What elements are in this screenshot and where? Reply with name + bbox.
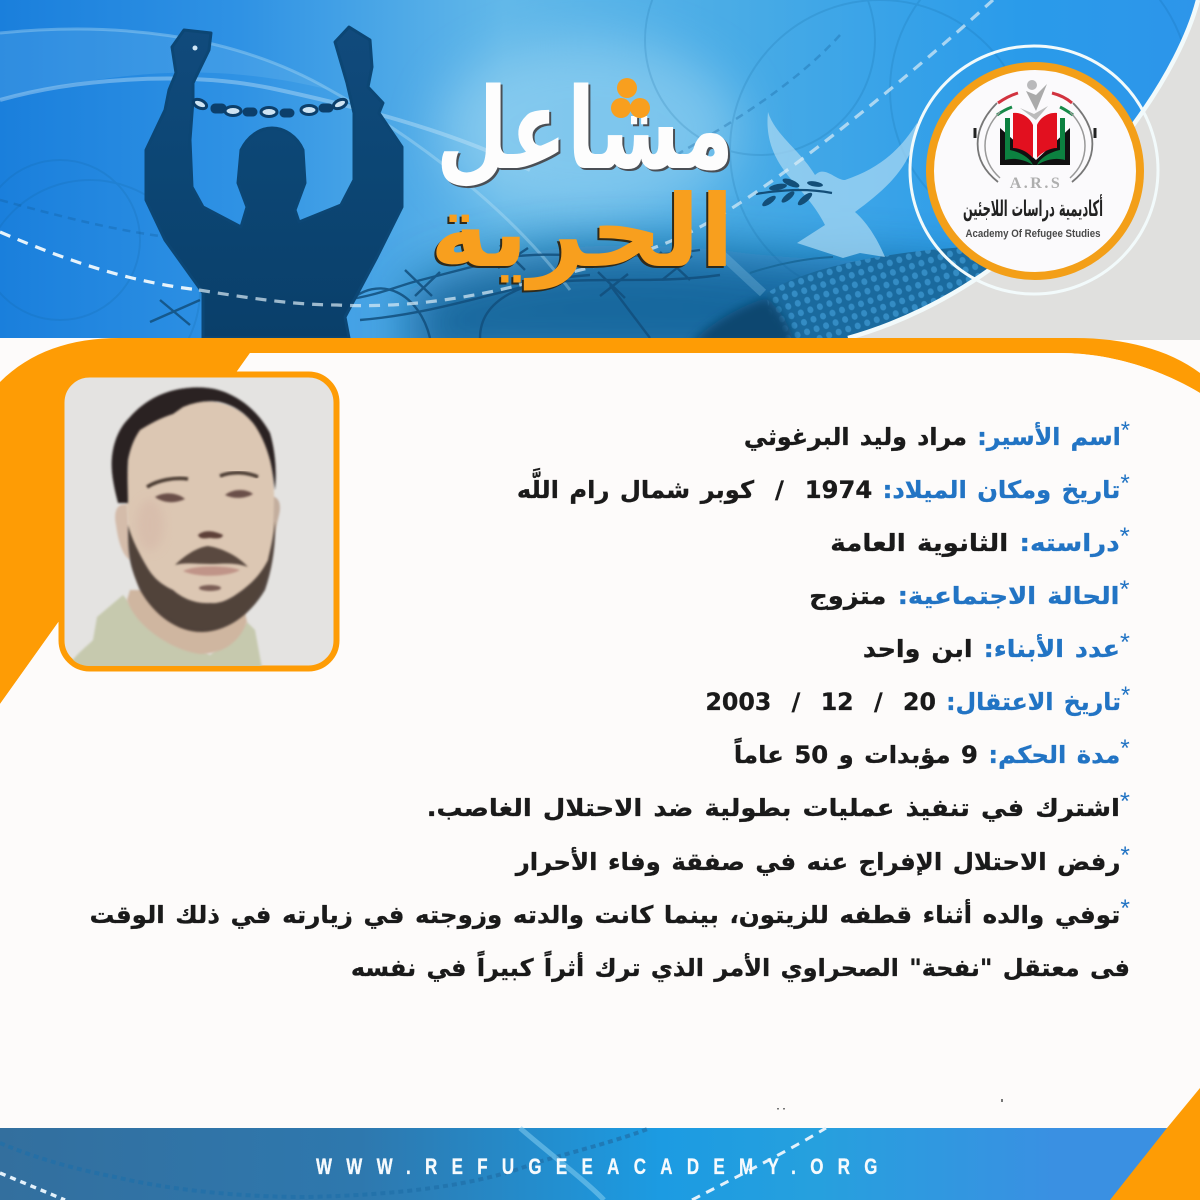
- white content panel: [0, 353, 1200, 1128]
- footer bar: [0, 1128, 1200, 1200]
- info line: name: *اسم الأسير: مراد وليد البرغوثي: [744, 417, 1130, 451]
- chain: [192, 97, 348, 116]
- website url: WWW.REFUGEEACADEMY.ORG: [316, 1154, 892, 1179]
- portrait photo: [62, 374, 336, 668]
- nose: [198, 531, 223, 538]
- footer orange corner: [1110, 1088, 1200, 1200]
- brows: [147, 478, 188, 487]
- info line: education: *دراسته: الثانوية العامة: [830, 523, 1130, 557]
- logo: A.R.S: A.R.S: [1010, 175, 1062, 192]
- orange band and left block: [0, 338, 1200, 704]
- info line: sentence: *مدة الحكم: 9 مؤبدات و 50 عاماً: [734, 735, 1130, 769]
- footer decoration: [0, 1128, 826, 1200]
- title: مشاعل: مشاعل: [438, 67, 736, 197]
- info line: marital status: *الحالة الاجتماعية: متزوج: [809, 576, 1130, 610]
- title: الحرية: الحرية: [430, 173, 734, 291]
- ears: [115, 504, 130, 560]
- header photo banner: [0, 0, 1196, 338]
- info line: father death: *توفي والده أثناء قطفه للزيتون، بينما كانت والدته وزوجته في زيارته في ذلك الوقت: [90, 895, 1130, 929]
- fence: [767, 247, 1000, 338]
- olive branch: [756, 178, 832, 206]
- barbed wire: [150, 245, 720, 338]
- logo: book emblem: [975, 80, 1095, 182]
- info line: children: *عدد الأبناء: ابن واحد: [863, 629, 1130, 663]
- dove: [767, 112, 917, 258]
- face: [126, 401, 275, 604]
- info line: birth: *تاريخ ومكان الميلاد: 1974 / كوبر شمال رام اللَّه: [517, 470, 1130, 504]
- logo: English name: Academy Of Refugee Studies: [966, 228, 1100, 240]
- specks: [777, 1099, 1003, 1110]
- info line: exchange deal: *رفض الاحتلال الإفراج عنه في صفقة وفاء الأحرار: [516, 842, 1130, 876]
- title: الحرية: الحرية: [428, 175, 732, 293]
- white dashed line: [0, 232, 199, 290]
- neck: [127, 590, 247, 654]
- info line: operations: *اشترك في تنفيذ عمليات بطولية ضد الاحتلال الغاصب.: [427, 788, 1130, 822]
- logo badge: [910, 46, 1158, 294]
- mustache: [175, 546, 248, 567]
- title: مشاعل: مشاعل: [436, 65, 734, 195]
- white arc around banner: [848, 0, 1198, 338]
- gray header corner: [800, 0, 1200, 340]
- sweater: [67, 595, 262, 668]
- beard: [128, 522, 275, 632]
- info line: father death continued: فى معتقل "نفحة" الصحراوي الأمر الذي ترك أثراً كبيراً في نفسه: [351, 954, 1130, 982]
- eyes: [155, 493, 185, 502]
- prisoner silhouette: [146, 27, 402, 338]
- hair: [112, 387, 276, 503]
- lips: [183, 566, 240, 576]
- info line: arrest date: *تاريخ الاعتقال: 20 / 12 / 2003: [705, 682, 1130, 716]
